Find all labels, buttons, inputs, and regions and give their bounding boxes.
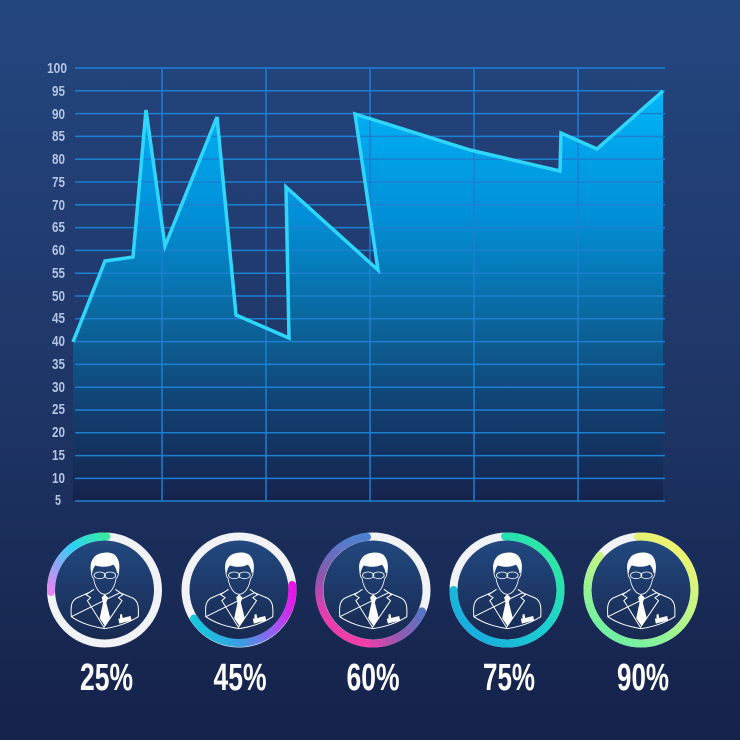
gauge 60% [319, 536, 426, 644]
progress arc [588, 537, 695, 644]
y axis labels: 30 [52, 379, 65, 396]
y axis labels: 60 [52, 242, 65, 259]
progress arc [454, 536, 560, 643]
y axis labels: 100 [47, 60, 67, 77]
progress arc: right [373, 611, 422, 644]
gauge 90% [588, 536, 695, 644]
label: 45%: 45% [214, 657, 266, 699]
y axis labels [47, 60, 67, 509]
ring [588, 536, 694, 644]
y axis labels: 50 [52, 288, 65, 305]
icon: businessman [340, 552, 407, 629]
label: 75%: 75% [483, 657, 535, 699]
y axis labels: 70 [52, 197, 65, 214]
icon: businessman [474, 552, 541, 629]
label: 60%: 60% [346, 657, 400, 699]
progress arc: left [319, 537, 373, 644]
label: 25%: 25% [80, 657, 133, 699]
ring [51, 536, 158, 644]
gauge 75% [454, 536, 560, 644]
progress arc [194, 585, 292, 643]
gauge 45% [186, 536, 292, 644]
ring [186, 536, 292, 644]
area chart [73, 68, 665, 501]
chart line [73, 91, 663, 342]
y axis labels: 40 [52, 333, 65, 350]
y axis labels: 10 [52, 470, 65, 487]
y axis labels: 5 [55, 492, 61, 509]
y axis labels: 75 [52, 174, 65, 191]
y axis labels: 90 [52, 106, 65, 123]
ring [454, 536, 560, 644]
y axis labels: 80 [52, 151, 65, 168]
y axis labels: 25 [52, 401, 65, 418]
ring [320, 536, 426, 644]
y axis labels: 55 [52, 265, 65, 282]
gauge 25% [51, 536, 158, 644]
y axis labels: 15 [52, 447, 65, 464]
progress arc [51, 536, 106, 592]
chart area fill [73, 91, 663, 501]
label: 90%: 90% [617, 657, 669, 699]
icon: businessman [608, 552, 675, 629]
y axis labels: 45 [52, 310, 65, 327]
y axis labels: 35 [52, 356, 65, 373]
y axis labels: 85 [52, 128, 65, 145]
y axis labels: 20 [52, 424, 65, 441]
y axis labels: 65 [52, 219, 65, 236]
y axis labels: 95 [52, 83, 65, 100]
icon: businessman [71, 552, 138, 629]
icon: businessman [206, 552, 273, 629]
